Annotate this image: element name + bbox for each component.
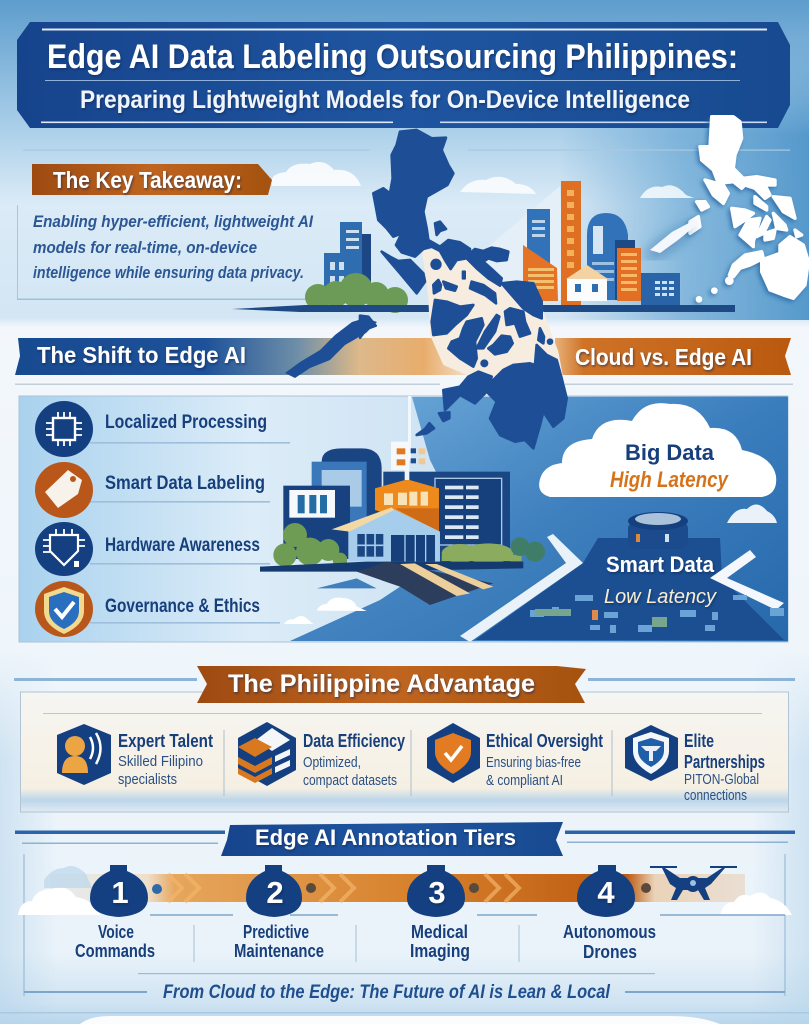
orange tower <box>561 181 581 305</box>
tier 2: Maintenance <box>234 941 324 961</box>
map: Palawan island <box>285 318 377 378</box>
footer tagline: From Cloud to the Edge: The Future of AI is Lean & Local <box>163 982 611 1003</box>
tier 2: 2 <box>266 875 284 910</box>
illustration: city skyline <box>232 177 735 313</box>
tier 2 <box>234 865 324 961</box>
advantage: data efficiency: compact datasets <box>303 772 397 789</box>
icon: drone <box>650 866 737 900</box>
advantage: elite partnerships: PITON-Global <box>684 771 759 788</box>
clouds <box>18 887 100 915</box>
advantage: ethical oversight: Ethical Oversight <box>486 731 603 751</box>
panel: smart data low latency: Low Latency <box>604 586 717 608</box>
low blue building <box>641 273 680 305</box>
subtitle text: Preparing Lightweight Models for On-Device Intelligence <box>80 86 690 114</box>
panel heading: cloud vs edge AI <box>555 338 791 375</box>
cloud: big data high latency: High Latency <box>610 467 730 492</box>
title banner <box>17 22 790 128</box>
blue building <box>527 209 550 269</box>
tier 1: Voice <box>98 922 134 942</box>
orange wedge building <box>523 245 558 301</box>
panel: smart data low latency <box>460 512 784 642</box>
panel: smart data low latency: Smart Data <box>606 552 715 577</box>
list: hardware awareness <box>35 522 270 576</box>
cloud: big data high latency <box>539 403 776 497</box>
key takeaway text: intelligence while ensuring data privacy. <box>33 263 304 282</box>
ground line <box>232 305 735 312</box>
list: localized processing <box>35 401 290 457</box>
tier 4 <box>563 865 656 962</box>
panel: annotation tiers <box>18 854 792 996</box>
clouds: small <box>727 504 777 523</box>
list: governance and ethics: Governance & Ethics <box>105 596 260 617</box>
advantage: expert talent: Expert Talent <box>118 731 213 751</box>
advantage: elite partnerships: Partnerships <box>684 752 765 772</box>
tier 4: Drones <box>583 942 637 962</box>
list: smart data labeling: Smart Data Labeling <box>105 473 265 494</box>
panel: key takeaway <box>17 150 790 300</box>
house <box>348 509 440 562</box>
map: white Palawan strip <box>650 217 700 253</box>
tier 3: Medical <box>411 922 468 942</box>
map: Philippines white inset <box>690 117 808 301</box>
advantage: elite partnerships: Elite <box>684 731 714 751</box>
hills and small clouds <box>317 578 377 588</box>
edge device <box>628 512 688 549</box>
tier 1: Commands <box>75 941 155 961</box>
advantage: data efficiency: Data Efficiency <box>303 731 405 751</box>
advantage: elite partnerships: connections <box>684 787 747 804</box>
advantage: ethical oversight: Ensuring bias-free <box>486 754 581 771</box>
advantage: ethical oversight: & compliant AI <box>486 772 563 789</box>
cloud beside ribbon <box>271 162 361 186</box>
tier 4: 4 <box>597 875 615 910</box>
trees <box>273 523 347 567</box>
list: localized processing: Localized Processing <box>105 412 267 433</box>
advantage: elite partnerships <box>625 725 765 804</box>
map: Philippines dark archipelago <box>360 130 567 448</box>
advantage: ethical oversight <box>427 723 603 789</box>
advantage: expert talent <box>57 724 213 788</box>
tier 4: Autonomous <box>563 922 656 942</box>
tier 3: 3 <box>428 875 446 910</box>
tier 3 <box>407 865 479 961</box>
panel heading: cloud vs edge AI: Cloud vs. Edge AI <box>575 344 752 370</box>
list: governance and ethics <box>35 581 280 637</box>
panel heading: the shift to edge AI <box>15 338 793 385</box>
tier 1: 1 <box>111 875 129 910</box>
heading: the Philippine advantage <box>14 666 795 812</box>
progress arrow band <box>50 874 745 902</box>
orange right building <box>617 248 641 301</box>
heading: edge AI annotation tiers: Edge AI Annotation Tiers <box>255 825 516 850</box>
bushes <box>305 273 408 313</box>
advantage: data efficiency <box>238 722 405 789</box>
left tower <box>324 222 362 290</box>
data blocks <box>530 595 784 633</box>
advantage: expert talent: specialists <box>118 771 177 788</box>
key takeaway text <box>33 212 314 282</box>
panel: advantages <box>20 692 788 812</box>
tier 1 <box>75 865 162 961</box>
title text: Edge AI Data Labeling Outsourcing Philippines: <box>47 38 738 76</box>
key takeaway text: Enabling hyper-efficient, lightweight AI <box>33 212 314 231</box>
bottom cloud band <box>0 1012 809 1024</box>
antenna <box>391 442 409 470</box>
advantage: data efficiency: Optimized, <box>303 754 361 771</box>
tier 2: Predictive <box>243 922 309 942</box>
tier 3: Imaging <box>410 941 470 961</box>
illustration: central edge campus <box>260 442 545 624</box>
panel: key takeaway: The Key Takeaway: <box>53 167 242 193</box>
divider lines <box>194 925 519 962</box>
key takeaway text: models for real-time, on-device <box>33 238 257 257</box>
cloud: big data high latency: Big Data <box>625 440 715 465</box>
house <box>566 265 608 279</box>
panel heading: the shift to edge AI: The Shift to Edge AI <box>37 342 246 368</box>
orange block <box>375 479 439 532</box>
heading: the Philippine advantage: The Philippine Advantage <box>228 670 535 698</box>
advantage: expert talent: Skilled Filipino <box>118 753 203 770</box>
list: smart data labeling <box>35 462 270 518</box>
ground and road <box>260 562 523 572</box>
dome building <box>587 213 628 300</box>
key takeaway ribbon <box>32 164 272 195</box>
panel: shift to edge AI comparison <box>19 396 788 642</box>
ribbon <box>197 666 586 703</box>
heading: edge AI annotation tiers <box>15 822 795 856</box>
list: hardware awareness: Hardware Awareness <box>105 535 260 556</box>
